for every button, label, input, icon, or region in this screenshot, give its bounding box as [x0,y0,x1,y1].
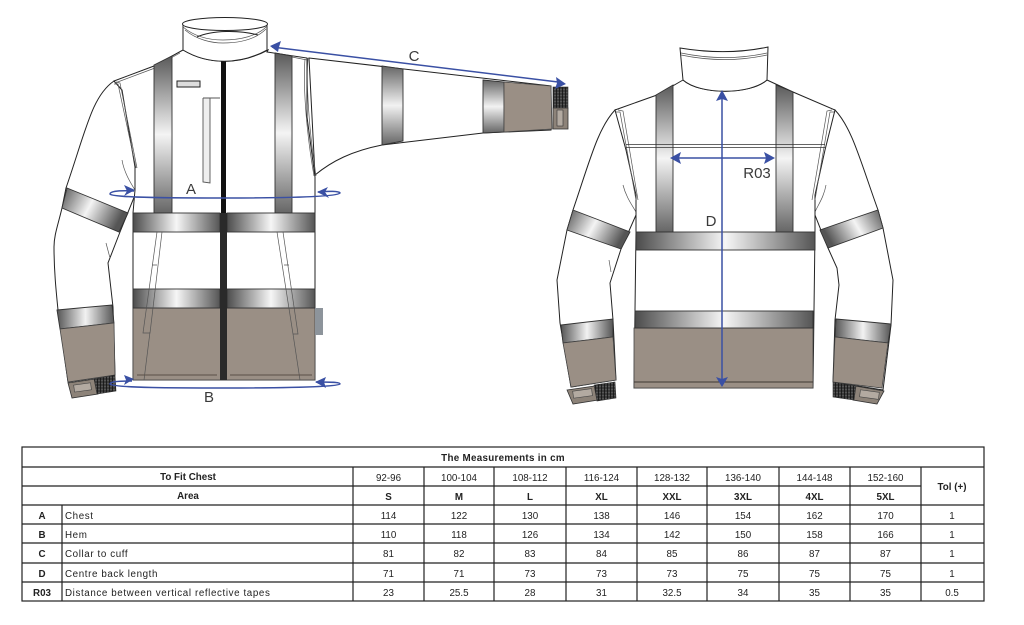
row: C collar to cuff: 87 [809,549,820,560]
lower pockets [137,232,312,380]
back right cuff [833,382,884,404]
row: A chest: Chest [65,511,94,522]
row: A chest: 170 [877,511,894,522]
label C: C [409,48,420,65]
row: D centre back length [38,569,955,580]
front left arm tape bands [57,188,128,382]
row: R03 distance between tapes: 0.5 [945,588,959,599]
row: A chest [38,511,955,522]
back right sleeve [815,110,893,390]
table title: The Measurements in cm [441,453,565,464]
row: R03 distance between tapes: 34 [738,588,749,599]
measure R03 arrow [670,152,775,164]
measure A arrow [110,185,340,198]
row: B hem: 1 [949,530,955,541]
row: R03 distance between tapes: 23 [383,588,394,599]
row: R03 distance between tapes: Distance between vertical reflective tapes [65,588,270,599]
row: to fit chest: To Fit Chest [160,472,217,483]
chest zip pocket [203,98,220,183]
row: area and sizes: 3XL [734,492,752,503]
row: to fit chest: 136-140 [725,473,762,484]
back vertical tapes [626,85,825,232]
chest badge [177,81,200,87]
row: C collar to cuff: 87 [880,549,891,560]
row: B hem: 110 [381,530,397,541]
row: R03 distance between tapes: R03 [33,588,52,599]
measure B arrow [110,375,340,388]
row: A chest: 146 [664,511,681,522]
row: C collar to cuff: 86 [738,549,749,560]
row: D centre back length: 1 [949,569,955,580]
row: C collar to cuff: 82 [454,549,464,560]
chest and hem tape bands [133,213,315,308]
row: to fit chest: 92-96 [376,473,402,484]
row: D centre back length: 71 [454,569,464,580]
front jacket illustration [54,18,568,398]
front left cuff [68,375,116,398]
row: R03 distance between tapes: 35 [880,588,891,599]
row: C collar to cuff: Collar to cuff [65,549,128,560]
front left sleeve [54,81,135,382]
high-vis vertical tapes [154,53,292,213]
row: R03 distance between tapes: 32.5 [662,588,682,599]
row: A chest: 162 [806,511,823,522]
row: C collar to cuff: C [38,549,46,560]
row: D centre back length: D [38,569,46,580]
tolerance header: Tol (+) [938,482,966,493]
row: D centre back length: 73 [667,569,678,580]
row: B hem: Hem [65,530,88,541]
row: area and sizes: XXL [662,492,682,503]
back left cuff [567,382,616,404]
row: to fit chest [160,472,904,484]
label R03: R03 [743,165,771,182]
row: D centre back length: 73 [525,569,536,580]
row: to fit chest: 152-160 [868,473,904,484]
row: D centre back length: Centre back length [65,569,158,580]
row: B hem: B [38,530,46,541]
back left sleeve [557,110,636,387]
collar [182,18,268,61]
row: to fit chest: 128-132 [654,473,690,484]
row: A chest: 130 [522,511,539,522]
label A: A [186,181,196,198]
row: A chest: 122 [451,511,467,522]
back hem panel [634,328,813,388]
row: to fit chest: 144-148 [797,473,833,484]
row: R03 distance between tapes: 28 [525,588,536,599]
measure D arrow [716,90,728,387]
row: R03 distance between tapes: 25.5 [449,588,469,599]
row: R03 distance between tapes: 35 [809,588,820,599]
front right sleeve [309,58,568,175]
row: area and sizes: 4XL [806,492,823,503]
row: B hem [38,530,955,541]
row: B hem: 118 [451,530,467,541]
row: D centre back length: 71 [383,569,394,580]
row: area and sizes [177,491,894,503]
row: B hem: 158 [806,530,823,541]
row: B hem: 126 [522,530,539,541]
row: R03 distance between tapes [33,588,959,599]
table grid [22,447,984,601]
row: to fit chest: 108-112 [512,473,548,484]
row: D centre back length: 73 [596,569,607,580]
front body [114,50,316,380]
row: C collar to cuff: 84 [596,549,607,560]
back collar [680,47,768,91]
measurement table [22,447,984,601]
row: area and sizes: M [455,492,463,503]
row: A chest: 1 [949,511,955,522]
centre zip [220,40,227,380]
row: B hem: 150 [735,530,752,541]
row: B hem: 134 [593,530,610,541]
back body [615,80,835,388]
row: R03 distance between tapes: 31 [596,588,607,599]
row: D centre back length: 75 [738,569,749,580]
measure C arrow [270,41,566,89]
row: A chest: 154 [735,511,752,522]
row: B hem: 166 [877,530,894,541]
row: C collar to cuff: 85 [667,549,678,560]
side label [315,308,323,335]
row: A chest: 114 [381,511,397,522]
back tape bands [635,232,815,328]
row: area and sizes: XL [595,492,608,503]
row: D centre back length: 75 [880,569,891,580]
row: area and sizes: S [385,492,392,503]
row: B hem: 142 [664,530,680,541]
row: to fit chest: 100-104 [441,473,478,484]
row: C collar to cuff: 1 [949,549,955,560]
row: area and sizes: L [527,492,533,503]
row: area and sizes: 5XL [877,492,894,503]
row: C collar to cuff: 81 [383,549,394,560]
row: D centre back length: 75 [809,569,820,580]
row: to fit chest: 116-124 [584,473,620,484]
label D: D [706,213,717,230]
row: A chest: A [38,511,46,522]
row: area and sizes: Area [177,491,199,502]
back jacket illustration [557,47,893,404]
label B: B [204,389,214,406]
row: C collar to cuff: 83 [525,549,536,560]
row: A chest: 138 [593,511,610,522]
row: C collar to cuff [38,549,955,560]
hem panel [133,308,315,380]
